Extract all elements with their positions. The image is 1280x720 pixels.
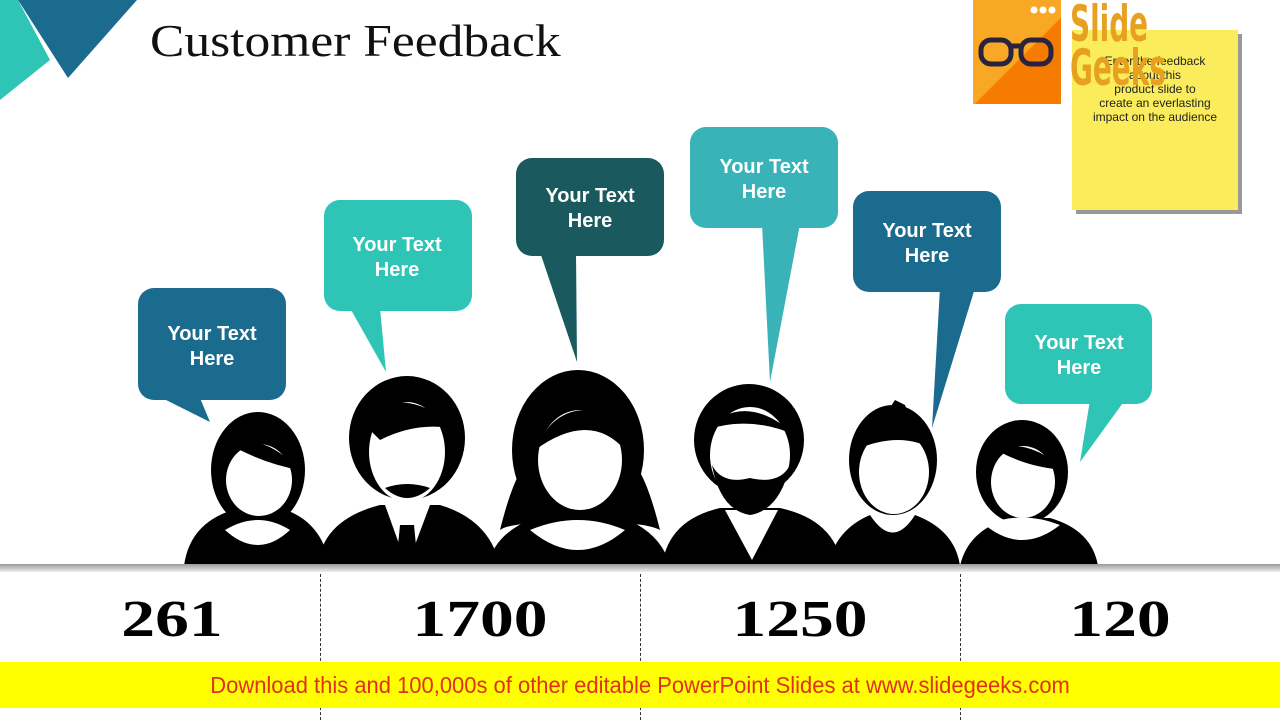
bubble 3: Your Text: [545, 185, 635, 207]
bubble 1: [138, 288, 286, 422]
bubble 5: Here: [905, 245, 949, 267]
bubble 4: Your Text: [719, 156, 809, 178]
bubble 2: [324, 200, 472, 372]
sticky note: [1072, 30, 1238, 210]
person 4 bearded man: [662, 384, 842, 566]
people silhouettes: [184, 370, 1098, 564]
bubble 4: [690, 127, 838, 382]
bubble 6: [1005, 304, 1152, 462]
bubble 1: Here: [190, 348, 234, 370]
bubble 3: Here: [568, 210, 612, 232]
number 120: 120: [1069, 591, 1171, 648]
sticky note: product slide to: [1114, 82, 1196, 96]
sticky note: Enter the feedback: [1105, 54, 1205, 68]
bubble 2: Your Text: [352, 234, 442, 256]
person 1 woman: [184, 412, 330, 566]
footer banner: Download this and 100,000s of other editable PowerPoint Slides at www.slidegeeks.com: [210, 672, 1070, 698]
bubble 2: Here: [375, 259, 419, 281]
bubble 6: Here: [1057, 357, 1101, 379]
logo: slide geeks: [973, 0, 1061, 104]
bubble 4: Here: [742, 181, 786, 203]
person 3 woman curly: [488, 370, 670, 566]
dashed dividers: [320, 574, 321, 720]
number 1250: 1250: [732, 591, 868, 648]
number 261: 261: [121, 591, 223, 648]
logo text: [1070, 0, 1166, 97]
sticky note: impact on the audience: [1093, 110, 1217, 124]
person 2 man with suit: [318, 376, 500, 566]
number 1700: 1700: [412, 591, 548, 648]
bubble 5: [853, 191, 1001, 428]
numbers row: [121, 591, 1171, 648]
sticky note: create an everlasting: [1099, 96, 1211, 110]
bubble 5: Your Text: [882, 220, 972, 242]
bubble 6: Your Text: [1034, 332, 1124, 354]
ground line: [0, 564, 1280, 572]
bubble 1: Your Text: [167, 323, 257, 345]
decorative corner triangles: [0, 0, 137, 100]
logo text: Geeks: [1070, 39, 1166, 97]
bubble 3: [516, 158, 664, 362]
title: Customer Feedback: [150, 15, 561, 66]
footer banner: [0, 662, 1280, 708]
person 6 woman: [960, 420, 1098, 566]
person 5 boy: [828, 400, 960, 566]
sticky note: about this: [1129, 68, 1181, 82]
